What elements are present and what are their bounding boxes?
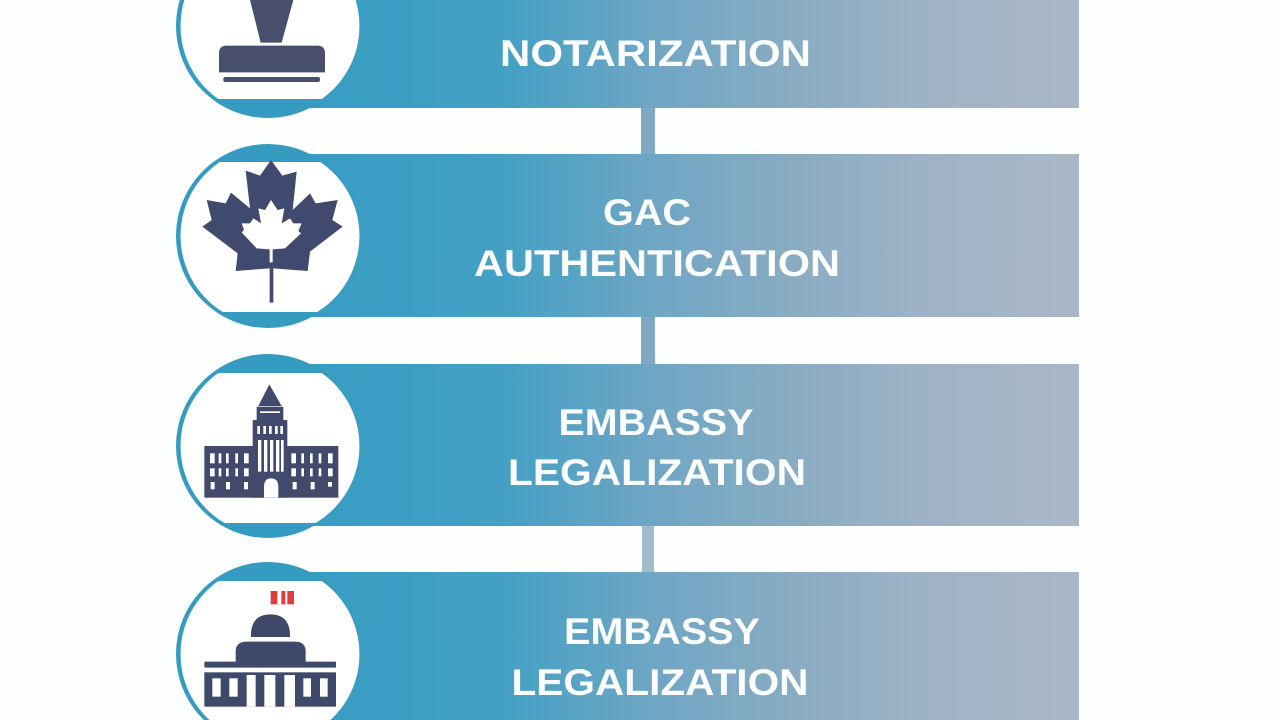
label: embassy legalization: EMBASSY xyxy=(564,611,760,652)
step 3: embassy legalization xyxy=(176,354,1079,538)
label: notarization: NOTARIZATION xyxy=(500,33,811,74)
label: embassy legalization: LEGALIZATION xyxy=(512,662,808,703)
icon: government building with tower xyxy=(204,384,338,498)
connector: step 2 to 3 xyxy=(641,317,655,364)
label: GAC authentication xyxy=(474,192,840,284)
icon: stamp xyxy=(219,0,325,82)
step 1: notarization xyxy=(176,0,1079,118)
icon: domed building with flag xyxy=(204,591,336,707)
step 4: embassy legalization xyxy=(176,562,1079,720)
label: GAC authentication: AUTHENTICATION xyxy=(474,243,840,284)
label: embassy legalization: EMBASSY xyxy=(558,402,754,443)
label: embassy legalization xyxy=(512,611,808,703)
connector: step 3 to 4 xyxy=(642,526,654,572)
label: GAC authentication: GAC xyxy=(603,192,691,233)
step 2: GAC authentication xyxy=(176,144,1079,328)
icon: maple leaf xyxy=(202,160,343,303)
connector: step 1 to 2 xyxy=(641,108,655,154)
label: embassy legalization: LEGALIZATION xyxy=(508,452,806,493)
process flow infographic xyxy=(176,0,1079,720)
label: embassy legalization xyxy=(508,402,806,493)
icon: red flag xyxy=(271,591,294,604)
